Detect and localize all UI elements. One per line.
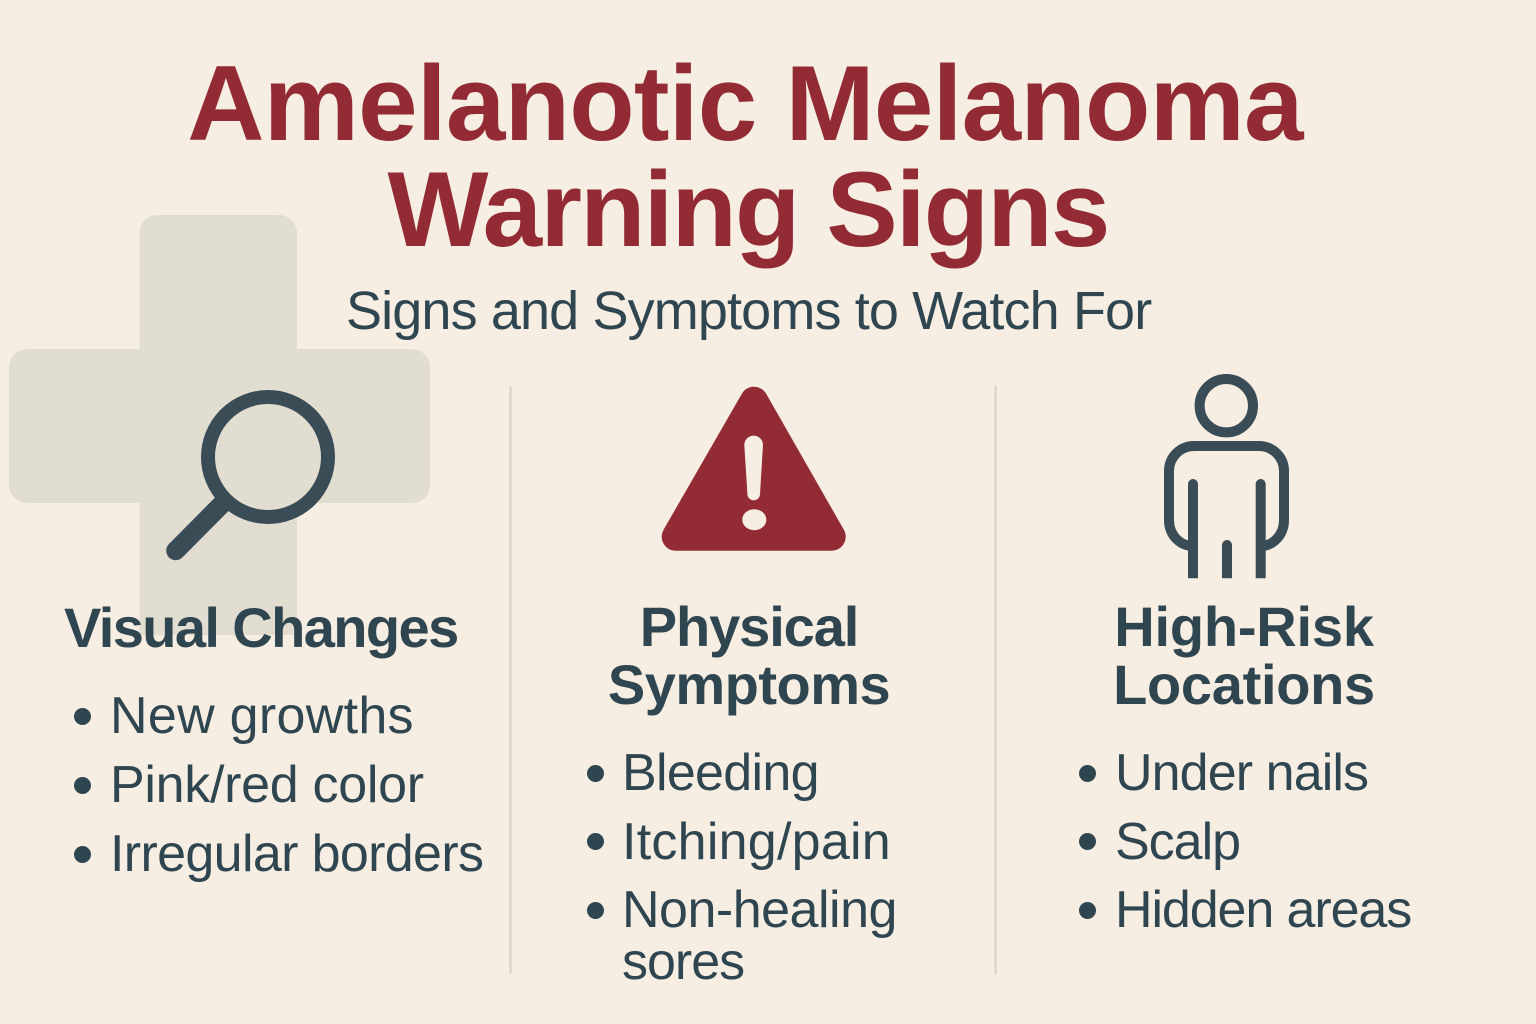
column divider left bbox=[509, 386, 512, 974]
heading: physical symptoms: Physical bbox=[640, 595, 858, 658]
title bbox=[187, 43, 1304, 269]
list: physical symptoms: Itching/pain bbox=[622, 813, 891, 871]
subtitle: Signs and Symptoms to Watch For bbox=[346, 281, 1151, 341]
panel: physical symptoms bbox=[587, 386, 897, 991]
heading: high-risk locations: High-Risk bbox=[1114, 595, 1374, 658]
list: visual changes: New growths bbox=[110, 687, 414, 745]
list: physical symptoms bbox=[587, 744, 897, 991]
list: visual changes: Pink/red color bbox=[110, 756, 424, 814]
icon: person outline bbox=[1164, 374, 1289, 578]
column divider right bbox=[994, 386, 997, 974]
list: visual changes bbox=[74, 687, 483, 883]
heading: physical symptoms: Symptoms bbox=[608, 653, 890, 716]
heading: physical symptoms bbox=[608, 595, 890, 716]
list: high-risk locations bbox=[1079, 744, 1411, 939]
list: high-risk locations: Scalp bbox=[1115, 813, 1240, 871]
heading: visual changes: Visual Changes bbox=[64, 596, 458, 659]
heading: high-risk locations bbox=[1113, 595, 1375, 716]
title: Amelanotic Melanoma bbox=[187, 43, 1303, 163]
list: physical symptoms: Non-healing bbox=[622, 881, 897, 939]
list: visual changes: Irregular borders bbox=[110, 825, 483, 883]
list: high-risk locations: Under nails bbox=[1115, 744, 1368, 802]
heading: high-risk locations: Locations bbox=[1113, 653, 1375, 716]
list: high-risk locations: Hidden areas bbox=[1115, 881, 1411, 939]
icon: magnifying glass bbox=[166, 390, 335, 560]
list: physical symptoms: Bleeding bbox=[622, 744, 819, 802]
panel: high-risk locations bbox=[1079, 374, 1411, 939]
icon: warning triangle bbox=[662, 386, 846, 551]
title: Warning Signs bbox=[388, 149, 1108, 269]
list: physical symptoms: sores bbox=[622, 933, 744, 991]
panel: visual changes bbox=[64, 390, 483, 883]
background medical cross bbox=[9, 215, 430, 635]
